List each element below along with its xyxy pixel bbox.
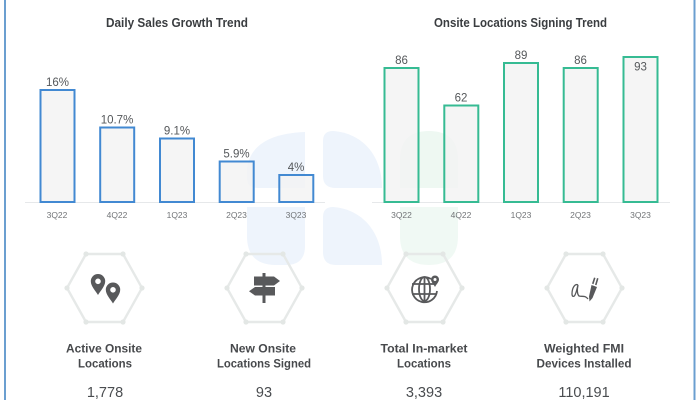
chart title: daily sales: Daily Sales Growth Trend — [106, 16, 248, 30]
stat: Weighted FMI Devices Installed: Devices Installed — [536, 356, 632, 370]
bar: 3Q23 93 — [624, 57, 658, 220]
bar: 3Q23 93: 3Q23 — [630, 210, 651, 220]
bar: 3Q22 16%: 3Q22 — [47, 210, 68, 220]
icon: globe with pin — [412, 276, 439, 302]
bar: 2Q23 86: 86 — [574, 55, 587, 67]
chart: Daily Sales Growth Trend — [25, 16, 325, 220]
bar: 3Q23 93: 93 — [634, 62, 647, 74]
bar: 1Q23 9.1%: 1Q23 — [167, 210, 188, 220]
bar: 4Q22 10.7% — [100, 114, 134, 220]
bar: 2Q23 86: 2Q23 — [570, 210, 591, 220]
icon: map pins — [91, 274, 120, 304]
bar: 4Q22 62: 4Q22 — [451, 210, 472, 220]
bar: 3Q22 86 — [384, 55, 418, 220]
label: Active Onsite — [66, 342, 142, 356]
icon: pen signature — [572, 278, 598, 302]
stat: Total In-market Locations: Locations — [397, 356, 451, 370]
bar: 3Q23 4%: 3Q23 — [286, 210, 307, 220]
bar: 2Q23 86 — [564, 55, 598, 220]
bar: 3Q22 86: 3Q22 — [391, 210, 412, 220]
bar: 4Q22 10.7%: 10.7% — [101, 114, 133, 126]
stat: New Onsite Locations Signed: Locations Signed — [217, 356, 311, 370]
bar: 4Q22 62 — [444, 92, 478, 220]
watermark logo — [247, 131, 458, 265]
axis line: daily sales — [25, 202, 325, 204]
label: New Onsite — [230, 342, 296, 356]
bar: 2Q23 5.9%: 5.9% — [223, 148, 250, 160]
label: Total In-market — [380, 342, 468, 356]
bar: 2Q23 5.9%: 2Q23 — [226, 210, 247, 220]
hexagon badge — [384, 251, 465, 325]
label: Weighted FMI — [544, 342, 624, 356]
icon: signpost — [249, 273, 280, 303]
hexagon badge — [544, 251, 625, 325]
stat: Total In-market Locations — [380, 251, 468, 400]
stat: Active Onsite Locations — [64, 251, 145, 400]
bar: 1Q23 89: 89 — [515, 50, 527, 62]
bar: 3Q22 16%: 16% — [46, 77, 69, 89]
bar: 3Q22 16% — [40, 77, 74, 220]
bar: 1Q23 89: 1Q23 — [511, 210, 532, 220]
axis line: onsite locations — [372, 202, 670, 204]
chart: Onsite Locations Signing Trend — [372, 16, 670, 220]
stat: Active Onsite Locations: Locations — [78, 356, 132, 370]
bar: 1Q23 9.1%: 9.1% — [164, 126, 190, 138]
bar: 1Q23 89 — [504, 50, 538, 220]
bar: 4Q22 62: 62 — [455, 92, 467, 104]
bar: 3Q23 4% — [279, 162, 313, 220]
hexagon badge — [224, 251, 305, 325]
bar: 4Q22 10.7%: 4Q22 — [107, 210, 128, 220]
hexagon badge — [64, 251, 145, 325]
stat: Weighted FMI Devices Installed — [536, 251, 632, 400]
bar: 3Q22 86: 86 — [395, 55, 408, 67]
bar: 3Q23 4%: 4% — [288, 162, 304, 174]
chart title: onsite locations: Onsite Locations Signing Trend — [434, 16, 607, 30]
bar: 2Q23 5.9% — [220, 148, 254, 220]
bar: 1Q23 9.1% — [160, 126, 194, 220]
stat: New Onsite Locations Signed — [217, 251, 311, 400]
